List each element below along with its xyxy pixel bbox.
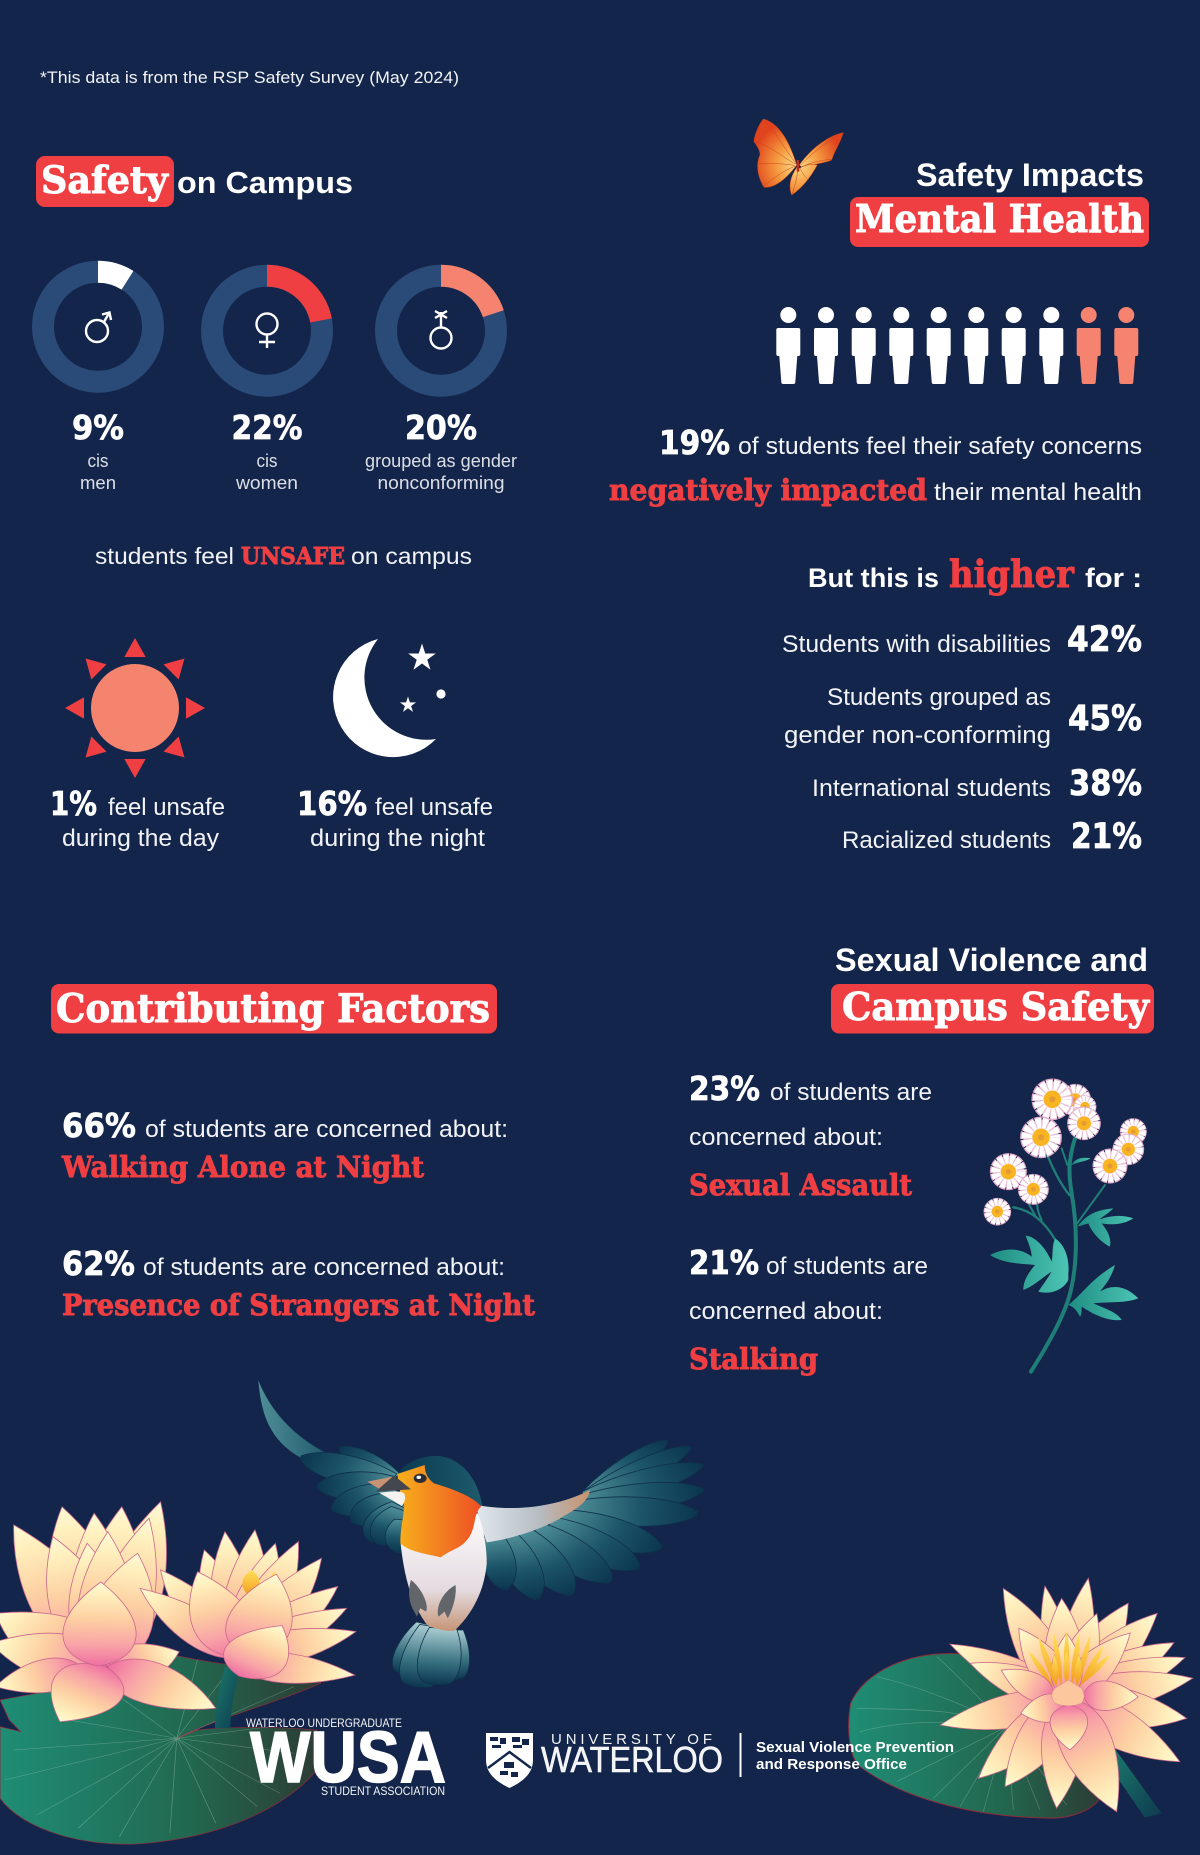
stat: 19% negatively impacted: 19% bbox=[659, 423, 730, 462]
stat: 62% presence of strangers at night: of students are concerned about: bbox=[143, 1254, 505, 1281]
large lily bbox=[0, 1496, 229, 1735]
lily pad bbox=[0, 1650, 321, 1844]
heading: safety on campus bbox=[36, 156, 353, 207]
list: higher rates by group: 21% bbox=[1071, 817, 1142, 857]
donut chart: cis men 9%: cis bbox=[88, 451, 108, 471]
breast bbox=[397, 1465, 481, 1557]
tail bbox=[386, 1620, 470, 1690]
donut chart: cis men 9%: men bbox=[80, 473, 116, 493]
right wing bbox=[478, 1434, 709, 1604]
stat: 23% sexual assault: Sexual Assault bbox=[689, 1168, 913, 1202]
left wing bbox=[258, 1379, 420, 1554]
lily pad bbox=[849, 1654, 1103, 1818]
stat: 16% unsafe during the night: 16% bbox=[297, 784, 367, 823]
office name: and Response Office bbox=[756, 1756, 907, 1773]
stat: 23% sexual assault: of students are bbox=[770, 1079, 932, 1106]
icon: male symbol bbox=[86, 312, 111, 342]
stat: 23% sexual assault: concerned about: bbox=[689, 1124, 883, 1151]
donut chart: cis men 9%: 9% bbox=[72, 408, 124, 447]
divider bbox=[740, 1733, 742, 1777]
stat: 19% negatively impacted: of students feel their safety concerns bbox=[738, 433, 1142, 460]
office name: Sexual Violence Prevention bbox=[756, 1739, 954, 1756]
stat: 62% presence of strangers at night: Presence of Strangers at Night bbox=[62, 1288, 536, 1322]
stat: 66% walking alone at night: of students are concerned about: bbox=[145, 1116, 508, 1143]
stat: 19% negatively impacted: negatively impacted bbox=[609, 473, 927, 507]
icon: gender nonconforming symbol bbox=[430, 311, 452, 348]
heading: sexual violence and campus safety: Campus Safety bbox=[842, 984, 1150, 1029]
donut chart: cis women 22% bbox=[212, 276, 322, 493]
body bbox=[400, 1513, 487, 1631]
illustration: bird bbox=[258, 1379, 709, 1690]
eye bbox=[414, 1474, 427, 1483]
caption: students feel unsafe: on campus bbox=[351, 543, 472, 569]
stat: 16% unsafe during the night bbox=[297, 784, 493, 852]
donut chart: cis men 9% bbox=[43, 272, 153, 493]
stat: 62% presence of strangers at night: 62% bbox=[62, 1244, 135, 1283]
heading: sexual violence and campus safety bbox=[831, 942, 1154, 1034]
icon: sun bbox=[65, 638, 205, 778]
icon: shield bbox=[486, 1733, 533, 1788]
stat: 23% sexual assault: 23% bbox=[689, 1069, 760, 1108]
list: higher rates by group: International students bbox=[812, 775, 1051, 802]
list: higher rates by group: Students grouped as bbox=[827, 684, 1051, 711]
list: higher rates by group: Racialized students bbox=[842, 827, 1051, 854]
logo: WUSA student association: WATERLOO UNDERGRADUATE bbox=[246, 1716, 402, 1730]
heading: safety on campus: on Campus bbox=[177, 165, 353, 200]
stat: 23% sexual assault bbox=[689, 1069, 932, 1202]
stat: 66% walking alone at night: 66% bbox=[62, 1106, 136, 1145]
list: higher rates by group: Students with disabilities bbox=[782, 631, 1051, 658]
caption: students feel unsafe bbox=[95, 543, 472, 570]
icon: butterfly bbox=[754, 119, 843, 195]
donut chart: cis women 22%: 22% bbox=[232, 408, 302, 447]
second lily bbox=[125, 1528, 362, 1690]
donut chart: gender nonconforming 20%: 20% bbox=[405, 408, 477, 447]
feet bbox=[409, 1580, 456, 1618]
subheading: but this is higher for: higher bbox=[949, 552, 1074, 596]
stat: 62% presence of strangers at night bbox=[62, 1244, 536, 1322]
stat: 1% unsafe during the day: 1% bbox=[50, 784, 97, 823]
panel: contributing factors bbox=[51, 984, 536, 1322]
lily flower bbox=[937, 1575, 1196, 1822]
stat: 1% unsafe during the day: during the day bbox=[62, 825, 219, 852]
list: higher rates by group: 42% bbox=[1067, 620, 1142, 660]
stat: 16% unsafe during the night: during the night bbox=[310, 825, 485, 852]
logo: WUSA student association: STUDENT ASSOCIATION bbox=[321, 1784, 445, 1798]
heading: contributing factors: Contributing Factors bbox=[56, 986, 490, 1032]
list: higher rates by group: 45% bbox=[1068, 699, 1142, 739]
panel: sexual violence and campus safety bbox=[689, 942, 1154, 1376]
icon row: ten people, two highlighted bbox=[776, 307, 1138, 384]
donut chart: gender nonconforming 20% bbox=[365, 276, 517, 493]
icon: female symbol bbox=[256, 314, 278, 348]
panel: safety on campus bbox=[36, 156, 517, 852]
source note: *This data is from the RSP Safety Survey (May 2024) bbox=[40, 68, 459, 87]
logo: University of Waterloo: UNIVERSITY OF bbox=[551, 1731, 712, 1748]
stalk bbox=[1113, 1747, 1162, 1818]
logo: WUSA student association: WUSA bbox=[250, 1718, 446, 1798]
donut chart: cis women 22%: cis bbox=[256, 451, 278, 471]
stat: 16% unsafe during the night: feel unsafe bbox=[375, 794, 493, 821]
head bbox=[397, 1456, 482, 1507]
subheading: but this is higher for bbox=[808, 552, 1142, 596]
stamens bbox=[1026, 1632, 1112, 1688]
stat: 19% negatively impacted bbox=[609, 423, 1142, 507]
heading: safety impacts mental health: Mental Health bbox=[855, 196, 1144, 241]
list: higher rates by group: gender non-conforming bbox=[784, 722, 1051, 749]
stat: 66% walking alone at night bbox=[61, 1106, 508, 1184]
heading: safety on campus: Safety bbox=[41, 158, 169, 202]
office name bbox=[756, 1739, 954, 1773]
illustration: left water lilies and pad bbox=[0, 1496, 362, 1844]
stat: 21% stalking bbox=[689, 1243, 928, 1376]
donut chart: gender nonconforming 20%: grouped as gender bbox=[365, 451, 517, 471]
throat bbox=[379, 1491, 405, 1506]
stat: 19% negatively impacted: their mental health bbox=[934, 479, 1142, 506]
list: higher rates by group: 38% bbox=[1069, 764, 1142, 804]
list: higher rates by group bbox=[782, 620, 1142, 857]
logo: University of Waterloo bbox=[486, 1731, 723, 1788]
stat: 21% stalking: 21% bbox=[689, 1243, 759, 1282]
stat: 1% unsafe during the day: feel unsafe bbox=[108, 794, 225, 821]
illustration: daisy plant bbox=[986, 1082, 1145, 1372]
stat: 1% unsafe during the day bbox=[50, 784, 225, 852]
panel: safety impacts mental health bbox=[609, 119, 1149, 857]
stat: 21% stalking: of students are bbox=[766, 1253, 928, 1280]
icon: moon and stars bbox=[333, 639, 446, 757]
caption: students feel unsafe: UNSAFE bbox=[241, 543, 345, 570]
heading: safety impacts mental health: Safety Impacts bbox=[916, 157, 1144, 193]
subheading: but this is higher for: But this is bbox=[808, 563, 939, 593]
stat: 21% stalking: Stalking bbox=[689, 1342, 818, 1376]
stalk bbox=[215, 1667, 240, 1728]
donut chart: gender nonconforming 20%: nonconforming bbox=[378, 473, 504, 493]
donut chart: cis women 22%: women bbox=[235, 473, 298, 493]
heading: sexual violence and campus safety: Sexual Violence and bbox=[835, 942, 1148, 978]
logo: University of Waterloo: WATERLOO bbox=[541, 1739, 723, 1780]
illustration: right water lily and pad bbox=[849, 1575, 1196, 1822]
heading: safety impacts mental health bbox=[850, 157, 1149, 247]
stat: 66% walking alone at night: Walking Alone at Night bbox=[61, 1150, 425, 1184]
caption: students feel unsafe: students feel bbox=[95, 543, 234, 569]
stat: 21% stalking: concerned about: bbox=[689, 1298, 883, 1325]
subheading: but this is higher for: for : bbox=[1085, 563, 1142, 593]
beak bbox=[376, 1475, 411, 1492]
